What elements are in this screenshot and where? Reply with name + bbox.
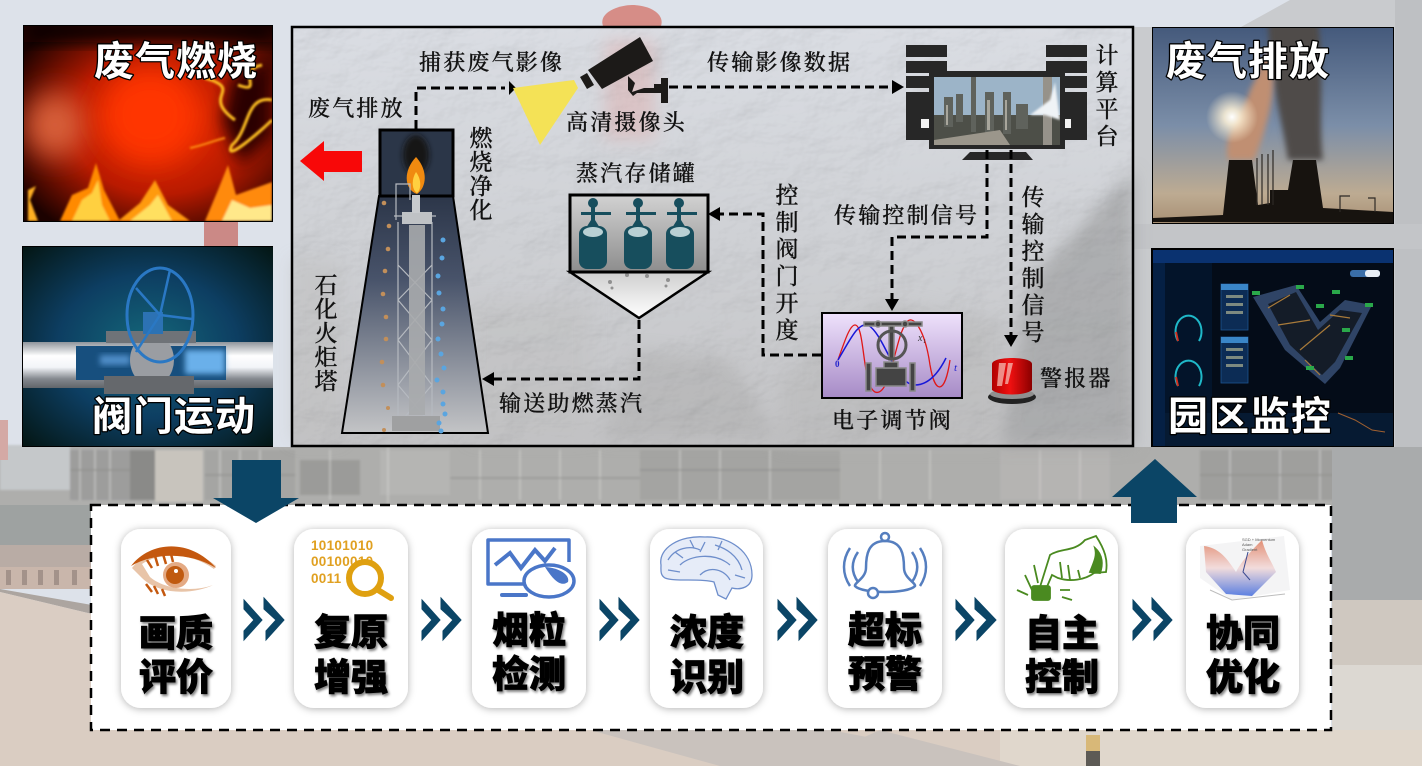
dashed arrow: computer to alarm bbox=[1004, 150, 1018, 347]
label: transmit control signal vertical: 传 bbox=[1022, 185, 1044, 210]
panel: waste gas combustion photo bbox=[23, 20, 273, 222]
label: flare tower: 火 bbox=[314, 321, 338, 346]
icon: binary magnifier: 0011 bbox=[311, 571, 342, 586]
chevrons bbox=[244, 598, 284, 640]
label: transmit control signal: 传输控制信号 bbox=[834, 203, 979, 228]
label: control valve opening: 度 bbox=[776, 318, 798, 343]
label: image quality evaluation: 评价 bbox=[139, 657, 213, 698]
camera field of view bbox=[513, 80, 578, 145]
chart: loss surface: SGD + Momentum bbox=[1242, 537, 1276, 542]
label: combustion purification: 化 bbox=[470, 198, 492, 223]
label: flare tower: 塔 bbox=[314, 369, 338, 394]
chart: loss surface bbox=[1200, 536, 1290, 600]
step: restoration and enhancement bbox=[294, 529, 408, 708]
chart: loss surface: Adam bbox=[1242, 542, 1253, 547]
label: smoke detection: 烟粒 bbox=[492, 610, 566, 651]
label: computing platform: 台 bbox=[1096, 124, 1118, 149]
step: collaborative optimization bbox=[1186, 529, 1299, 708]
step: image quality evaluation bbox=[121, 529, 231, 708]
chevrons bbox=[778, 598, 817, 640]
icon: camera bbox=[580, 37, 668, 103]
icon: eye bbox=[131, 546, 216, 596]
dashed arrow: valve to tank bbox=[708, 207, 821, 355]
label: transmit image data: 传输影像数据 bbox=[707, 50, 852, 75]
label: capture exhaust image: 捕获废气影像 bbox=[419, 50, 564, 75]
dashed arrow: camera to computer bbox=[669, 80, 904, 94]
label: image quality evaluation: 画质 bbox=[139, 612, 213, 654]
label: over-limit warning: 超标 bbox=[848, 610, 922, 651]
label: control valve opening: 制 bbox=[776, 210, 798, 235]
panel: park monitoring screen bbox=[1151, 248, 1394, 447]
electronic control valve: t bbox=[954, 362, 958, 374]
flare tower bbox=[342, 130, 488, 434]
label: HD camera: 高清摄像头 bbox=[566, 110, 687, 135]
label: transmit control signal vertical: 号 bbox=[1022, 320, 1044, 345]
label: transmit control signal vertical: 控 bbox=[1022, 239, 1044, 264]
label: smoke detection: 检测 bbox=[492, 653, 566, 695]
step: concentration recognition bbox=[650, 529, 763, 708]
label: combustion purification: 燃 bbox=[470, 126, 494, 151]
chevrons bbox=[600, 598, 639, 640]
label: deliver combustion steam: 输送助燃蒸汽 bbox=[499, 391, 644, 416]
label: autonomous control: 自主 bbox=[1025, 613, 1099, 654]
icon: brain bbox=[661, 537, 752, 599]
label: flare tower: 化 bbox=[314, 297, 338, 322]
dashed arrow: tank to tower bbox=[482, 320, 639, 386]
label: transmit control signal vertical: 制 bbox=[1022, 266, 1044, 291]
electronic control valve: x₁ bbox=[917, 333, 926, 344]
label: concentration recognition: 浓度 bbox=[670, 612, 744, 653]
label: restoration and enhancement: 复原 bbox=[314, 612, 388, 653]
label: electronic control valve: 电子调节阀 bbox=[832, 408, 953, 433]
label: alarm: 警报器 bbox=[1040, 366, 1113, 391]
heading: park monitoring: 园区监控 bbox=[1168, 395, 1332, 439]
icon: binary magnifier: 10101010 bbox=[311, 538, 373, 553]
panel: process steps bbox=[91, 459, 1331, 730]
arrow: exhaust out bbox=[300, 141, 362, 181]
step: smoke detection bbox=[472, 529, 586, 708]
label: control valve opening: 门 bbox=[776, 264, 798, 289]
steam storage tank bbox=[570, 195, 708, 318]
label: computing platform: 算 bbox=[1096, 70, 1118, 95]
icon: alarm bbox=[988, 358, 1036, 404]
arrow: down into steps bbox=[213, 460, 299, 523]
label: flare tower: 炬 bbox=[314, 345, 338, 370]
label: exhaust emission: 废气排放 bbox=[308, 96, 405, 121]
label: transmit control signal vertical: 输 bbox=[1022, 212, 1044, 237]
label: autonomous control: 控制 bbox=[1025, 657, 1099, 698]
label: control valve opening: 开 bbox=[776, 291, 798, 316]
icon: computing platform bbox=[906, 45, 1087, 160]
panel: process diagram bbox=[292, 27, 1134, 446]
chevrons bbox=[956, 598, 996, 640]
icon: monitor gauge bbox=[488, 540, 574, 597]
label: concentration recognition: 识别 bbox=[670, 657, 744, 698]
heading: valve motion: 阀门运动 bbox=[92, 395, 256, 439]
electronic control valve bbox=[822, 313, 962, 398]
label: combustion purification: 烧 bbox=[470, 150, 492, 175]
dashed arrow: tower to camera bbox=[416, 81, 516, 129]
step: over-limit warning bbox=[828, 529, 942, 708]
heading: waste gas emission: 废气排放 bbox=[1166, 40, 1330, 84]
label: collaborative optimization: 协同 bbox=[1206, 613, 1280, 654]
heading: waste gas combustion: 废气燃烧 bbox=[94, 40, 258, 84]
panel: valve motion photo bbox=[22, 246, 273, 447]
label: restoration and enhancement: 增强 bbox=[314, 657, 388, 698]
label: control valve opening: 阀 bbox=[776, 237, 798, 262]
label: over-limit warning: 预警 bbox=[848, 654, 922, 695]
label: computing platform: 计 bbox=[1096, 43, 1118, 68]
label: combustion purification: 净 bbox=[470, 174, 492, 199]
label: transmit control signal vertical: 信 bbox=[1022, 293, 1044, 318]
dashed arrow: computer to valve bbox=[885, 150, 987, 311]
chevrons bbox=[422, 598, 461, 640]
label: computing platform: 平 bbox=[1096, 97, 1118, 122]
icon: bell bbox=[844, 533, 926, 598]
icon: hand pressing button bbox=[1017, 536, 1107, 600]
step: autonomous control bbox=[1005, 529, 1118, 708]
label: flare tower: 石 bbox=[314, 273, 338, 298]
arrow: up out of steps bbox=[1112, 459, 1197, 523]
icon: binary magnifier bbox=[311, 538, 391, 598]
label: collaborative optimization: 优化 bbox=[1206, 657, 1280, 698]
label: steam storage tank: 蒸汽存储罐 bbox=[576, 161, 697, 186]
icon: binary magnifier: 00100010 bbox=[311, 554, 373, 569]
panel: waste gas emission photo bbox=[1152, 22, 1394, 224]
label: control valve opening: 控 bbox=[776, 183, 798, 208]
electronic control valve: 0 bbox=[835, 359, 840, 369]
chart: loss surface: Gradient bbox=[1242, 547, 1258, 552]
chevrons bbox=[1133, 598, 1172, 640]
